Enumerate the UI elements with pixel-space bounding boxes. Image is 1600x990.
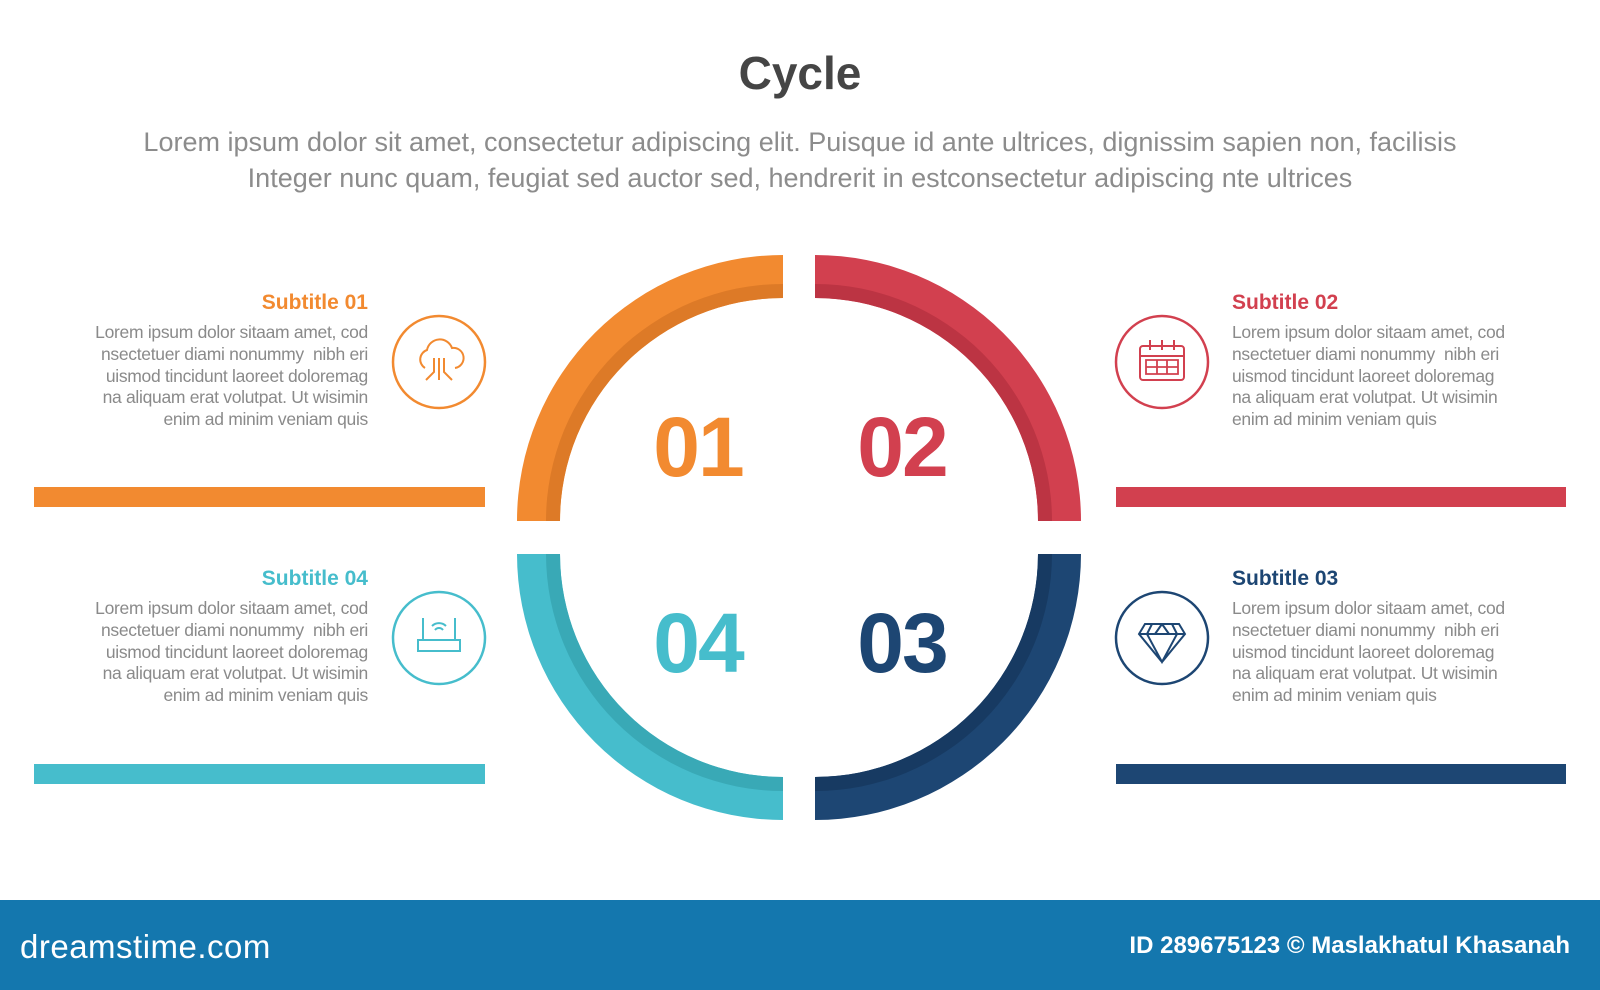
quarter 03: [815, 554, 1081, 820]
text block 04: Lorem ipsum dolor sitaam amet, cod: [95, 598, 368, 618]
text block 03: [1232, 567, 1505, 705]
text block 04: enim ad minim veniam quis: [163, 685, 368, 705]
quarter 02: [815, 255, 1081, 521]
description text: [143, 127, 1457, 193]
text block 02: uismod tincidunt laoreet doloremag: [1232, 366, 1494, 386]
text block 03: na aliquam erat volutpat. Ut wisimin: [1232, 663, 1497, 683]
text block 01: Subtitle 01: [262, 291, 368, 314]
text block 03: enim ad minim veniam quis: [1232, 685, 1437, 705]
footer: [0, 900, 1600, 990]
text block 02: na aliquam erat volutpat. Ut wisimin: [1232, 387, 1497, 407]
number 03: 03: [857, 596, 947, 690]
quarter 04: [517, 554, 783, 820]
bar right top: [1116, 487, 1566, 507]
text block 01: nsectetuer diami nonummy nibh eri: [101, 344, 368, 364]
text block 02: [1232, 291, 1505, 429]
text block 02: Subtitle 02: [1232, 291, 1338, 314]
text block 01: enim ad minim veniam quis: [163, 409, 368, 429]
text block 03: Lorem ipsum dolor sitaam amet, cod: [1232, 598, 1505, 618]
footer credit: ID 289675123 © Maslakhatul Khasanah: [1129, 932, 1570, 959]
icon: router: [393, 592, 485, 684]
text block 01: uismod tincidunt laoreet doloremag: [106, 366, 368, 386]
text block 01: na aliquam erat volutpat. Ut wisimin: [103, 387, 368, 407]
icon: diamond: [1116, 592, 1208, 684]
text block 01: Lorem ipsum dolor sitaam amet, cod: [95, 322, 368, 342]
bar left top: [34, 487, 485, 507]
quarter 01: [517, 255, 783, 521]
text block 04: Subtitle 04: [262, 567, 368, 590]
icon: calendar: [1116, 316, 1208, 408]
number 04: 04: [653, 596, 743, 690]
bar left bottom: [34, 764, 485, 784]
text block 01: [95, 291, 368, 429]
description text: Integer nunc quam, feugiat sed auctor sed, hendrerit in estconsectetur adipiscing nte ultrices: [248, 163, 1352, 193]
bar right bottom: [1116, 764, 1566, 784]
number 02: 02: [857, 400, 947, 494]
text block 03: nsectetuer diami nonummy nibh eri: [1232, 620, 1499, 640]
text block 03: uismod tincidunt laoreet doloremag: [1232, 642, 1494, 662]
footer logo: dreamstime.com: [20, 928, 271, 965]
text block 04: [95, 567, 368, 705]
title: Cycle: [739, 47, 861, 99]
text block 02: Lorem ipsum dolor sitaam amet, cod: [1232, 322, 1505, 342]
text block 03: Subtitle 03: [1232, 567, 1338, 590]
description text: Lorem ipsum dolor sit amet, consectetur adipiscing elit. Puisque id ante ultrices, dignissim sapien non, facilisis: [143, 127, 1457, 157]
text block 02: enim ad minim veniam quis: [1232, 409, 1437, 429]
text block 02: nsectetuer diami nonummy nibh eri: [1232, 344, 1499, 364]
number 01: 01: [653, 400, 743, 494]
icon: cloud: [393, 316, 485, 408]
text block 04: nsectetuer diami nonummy nibh eri: [101, 620, 368, 640]
text block 04: na aliquam erat volutpat. Ut wisimin: [103, 663, 368, 683]
text block 04: uismod tincidunt laoreet doloremag: [106, 642, 368, 662]
